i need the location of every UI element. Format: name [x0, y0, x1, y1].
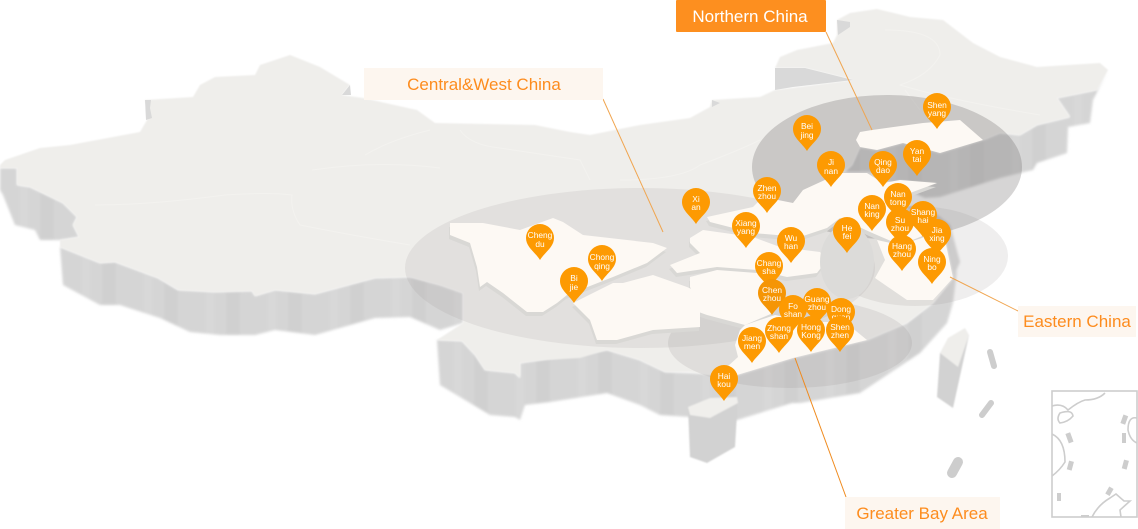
pin: Suzhou: zhou: [891, 223, 909, 233]
leader line: greater bay area: [795, 358, 846, 497]
pin: Wuhan: Wu: [785, 233, 798, 243]
pin: Jiangmen: Jiang: [742, 333, 762, 343]
pin: Qingdao: [869, 151, 897, 187]
pin: Guangzhou: zhou: [808, 302, 826, 312]
pin: Hangzhou: zhou: [893, 249, 911, 259]
pin: Xian: Xi: [692, 194, 700, 204]
province: liaoning: [856, 120, 983, 153]
pin: Shanghai: Shang: [911, 207, 935, 217]
pin: Chongqing: Chong: [590, 252, 615, 262]
province border lines: [95, 30, 1040, 245]
pin: Ningbo: bo: [927, 262, 937, 272]
pin: Dongguan: [827, 298, 855, 334]
pin: Guangzhou: Guang: [804, 294, 830, 304]
label: central and west china: Central&West China: [407, 75, 561, 94]
pin: Jiaxing: Jia: [932, 225, 943, 235]
label: northern china: Northern China: [692, 7, 808, 26]
pin: Dongguan: Dong: [831, 304, 851, 314]
province: hunan: [690, 270, 785, 325]
pin: Changsha: Chang: [757, 258, 782, 268]
pin: Ningbo: Ning: [923, 254, 941, 264]
pin: Jiaxing: [923, 219, 951, 255]
pin: Chengdu: [526, 224, 554, 260]
pin: Bijie: Bi: [570, 273, 578, 283]
pin: Zhongshan: [765, 317, 793, 353]
pin: Xiangyang: yang: [737, 226, 755, 236]
pin: Suzhou: Su: [895, 215, 905, 225]
province: guizhou: [573, 275, 700, 340]
pin: Suzhou: [886, 208, 914, 244]
label: greater bay area: Greater Bay Area: [856, 504, 988, 523]
leader line: northern china: [826, 32, 872, 130]
label: eastern china: [1018, 306, 1136, 337]
province: hainan: [688, 397, 738, 463]
province: hubei: [670, 230, 827, 277]
pin: Shenyang: yang: [928, 108, 946, 118]
pin: Hefei: fei: [843, 231, 852, 241]
pin: Jinan: nan: [824, 166, 838, 176]
pin: Chongqing: qing: [594, 261, 610, 271]
pin: Zhenzhou: Zhen: [757, 183, 777, 193]
pin: Changsha: [755, 252, 783, 288]
pin: Haikou: Hai: [718, 371, 730, 381]
pin: Hefei: [833, 217, 861, 253]
province: henan shandong jiangsu: [707, 173, 937, 245]
region ellipse: northern: [752, 95, 1022, 239]
pin: Yantai: [903, 140, 931, 176]
pin: Hong Kong: Kong: [801, 330, 821, 340]
label: northern china: [676, 0, 826, 32]
pin: Zhongshan: Zhong: [767, 323, 791, 333]
pin: Zhenzhou: zhou: [758, 191, 776, 201]
pin: Haikou: [710, 365, 738, 401]
pin: Changsha: sha: [762, 266, 776, 276]
label: eastern china: Eastern China: [1023, 312, 1131, 331]
pin: Shanghai: [909, 201, 937, 237]
pin: Nanjing: king: [864, 209, 880, 219]
pin: Shenzhen: Shen: [830, 322, 850, 332]
pin: Hangzhou: [888, 235, 916, 271]
pin: Chenzhou: [758, 279, 786, 315]
pin: Jiaxing: xing: [929, 233, 945, 243]
map surface: [0, 9, 1108, 378]
pin: Nantong: [884, 183, 912, 219]
island: taiwan: [937, 328, 969, 408]
province: zhejiang: [875, 237, 953, 300]
pin: Yantai: tai: [913, 154, 922, 164]
leader line: central and west china: [603, 99, 663, 232]
pin: Haikou: kou: [717, 379, 731, 389]
pin: Nanjing: Nan: [864, 201, 880, 211]
region ellipse: greater bay: [668, 298, 912, 388]
map walls: [0, 70, 1108, 420]
region ellipse: eastern: [822, 206, 1008, 306]
pin: Yantai: Yan: [910, 146, 924, 156]
pin: Chengdu: Cheng: [528, 230, 553, 240]
pin: Wuhan: [777, 227, 805, 263]
region ellipse: central and west: [405, 188, 875, 348]
pin: Jiangmen: men: [744, 341, 760, 351]
pin: Hong Kong: [797, 316, 825, 352]
region overlap: anhui: [820, 225, 874, 299]
pin: Jinan: Ji: [828, 157, 834, 167]
province shadows: [449, 177, 936, 344]
pin: Beijing: [793, 115, 821, 151]
pin: Xian: an: [691, 202, 701, 212]
pin: Shenzhen: [826, 316, 854, 352]
pin: Chenzhou: zhou: [763, 293, 781, 303]
pin: Jiangmen: [738, 327, 766, 363]
pin: Beijing: jing: [799, 130, 814, 140]
pin: Nantong: Nan: [890, 189, 906, 199]
pin: Shenyang: [923, 93, 951, 129]
pin: Beijing: Bei: [801, 121, 813, 131]
province: sichuan chongqing: [450, 218, 667, 312]
pin: Qingdao: dao: [876, 165, 890, 175]
pin: Dongguan: guan: [832, 312, 851, 322]
pin: Hong Kong: Hong: [801, 322, 821, 332]
pin: Xiangyang: Xiang: [735, 218, 757, 228]
pin: Xiangyang: [732, 212, 760, 248]
leader line: eastern china: [950, 277, 1018, 311]
pin: Chenzhou: Chen: [762, 285, 782, 295]
pin: Jinan: [817, 151, 845, 187]
pin: Bijie: jie: [569, 282, 579, 292]
pin: Foshan: [779, 295, 807, 331]
pin: Shenyang: Shen: [927, 100, 947, 110]
pin: Hangzhou: Hang: [892, 241, 912, 251]
inset map: [1052, 391, 1137, 517]
pin: Zhongshan: shan: [770, 331, 788, 341]
pin: Qingdao: Qing: [874, 157, 892, 167]
pin: Foshan: shan: [784, 309, 802, 319]
pin: Hefei: He: [842, 223, 853, 233]
pin: Chengdu: du: [535, 239, 545, 249]
pin: Shanghai: hai: [917, 215, 929, 225]
pin: Xian: [682, 188, 710, 224]
province: guangdong: [727, 315, 867, 375]
pin: Chongqing: [588, 245, 616, 281]
pin: Bijie: [560, 267, 588, 303]
south china sea islands: [952, 352, 994, 473]
pin: Ningbo: [918, 248, 946, 284]
pin: Zhenzhou: [753, 177, 781, 213]
label: central and west china: [364, 68, 603, 100]
pin: Guangzhou: [803, 288, 831, 324]
pin: Nantong: tong: [890, 197, 906, 207]
pin: Shenzhen: zhen: [831, 330, 849, 340]
pin: Foshan: Fo: [788, 301, 798, 311]
small wall notches: [145, 20, 853, 120]
pin: Wuhan: han: [784, 241, 798, 251]
label: greater bay area: [845, 497, 1000, 529]
pin: Nanjing: [858, 195, 886, 231]
